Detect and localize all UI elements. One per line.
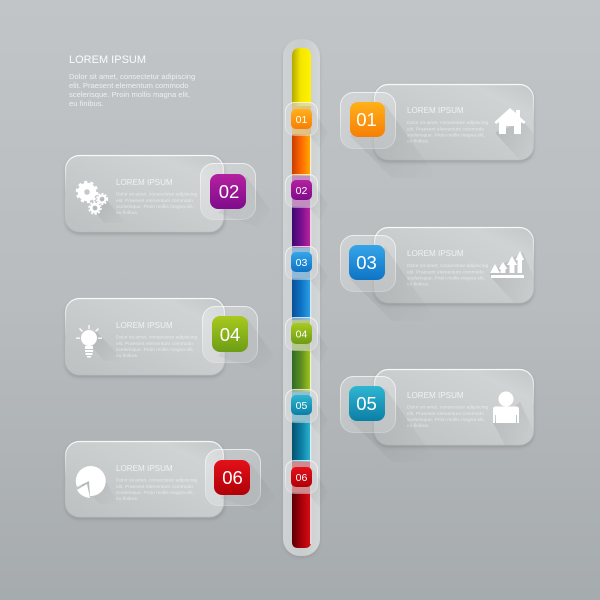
panel: 01 home: [340, 84, 534, 178]
intro text: eu finibus.: [69, 99, 104, 108]
icon: person: [493, 392, 519, 423]
heading: LOREM IPSUM: [116, 321, 173, 330]
body text: elit. Praesent elementum commodo: [116, 198, 193, 204]
body text: elit. Praesent elementum commodo: [407, 270, 484, 276]
number badge: 06: [222, 467, 243, 488]
panel: 05 person: [340, 370, 534, 462]
icon: gears: [77, 182, 107, 214]
heading: LOREM IPSUM: [69, 54, 146, 66]
body text: scelerisque. Proin mollis magna elit,: [407, 276, 485, 282]
intro text: elit. Praesent elementum commodo: [69, 81, 188, 90]
panel: 02 gears: [65, 156, 271, 234]
body text: eu finibus.: [407, 423, 429, 429]
number badge: [340, 376, 437, 462]
icon: house: [494, 108, 526, 134]
body text: scelerisque. Proin mollis magna elit,: [407, 417, 485, 423]
body text: elit. Praesent elementum commodo: [407, 411, 484, 417]
number badge: [340, 236, 437, 321]
number badge: [202, 306, 274, 370]
panel: 03 chart: [340, 228, 534, 321]
icon shadow: [493, 402, 534, 445]
number badge: [206, 450, 276, 512]
heading: LOREM IPSUM: [116, 464, 173, 473]
icon shadow: [490, 252, 534, 303]
number badge: [340, 92, 437, 178]
body text: elit. Praesent elementum commodo: [407, 126, 484, 132]
body text: eu finibus.: [407, 282, 429, 288]
icon: chart baseline: [491, 275, 524, 278]
panel: 04 bulb: [65, 298, 274, 378]
number badge: 02: [219, 181, 239, 202]
timeline marker 01: [286, 102, 328, 149]
intro text: scelerisque. Proin mollis magna elit,: [69, 90, 190, 99]
body text: Dolor sit amet, consectetur adipiscing: [116, 478, 198, 484]
number badge: 01: [356, 109, 377, 130]
number badge: 04: [220, 324, 240, 345]
body text: Dolor sit amet, consectetur adipiscing: [116, 334, 198, 340]
heading: LOREM IPSUM: [116, 178, 173, 187]
number badge: 03: [356, 252, 377, 273]
timeline column: [283, 39, 320, 558]
timeline marker 02: [286, 174, 328, 221]
heading: LOREM IPSUM: [407, 249, 464, 258]
body text: elit. Praesent elementum commodo: [116, 341, 193, 347]
body text: scelerisque. Proin mollis magna elit,: [116, 204, 194, 210]
timeline marker 03: [286, 246, 328, 293]
body text: scelerisque. Proin mollis magna elit,: [407, 132, 485, 138]
body text: elit. Praesent elementum commodo: [116, 484, 193, 490]
body text: Dolor sit amet, consectetur adipiscing: [407, 120, 489, 126]
timeline marker 03: 03: [296, 257, 307, 269]
body text: scelerisque. Proin mollis magna elit,: [116, 490, 194, 496]
heading: LOREM IPSUM: [407, 391, 464, 400]
body text: Dolor sit amet, consectetur adipiscing: [407, 263, 489, 269]
timeline marker 06: [286, 460, 328, 508]
timeline marker 04: [286, 318, 328, 364]
timeline marker 05: [286, 390, 328, 436]
icon: rising arrows: [490, 251, 524, 273]
icon shadow: [78, 470, 118, 504]
timeline marker 05: 05: [296, 400, 307, 412]
icon shadow: [496, 122, 534, 160]
icon: light bulb: [76, 325, 102, 358]
number badge: 05: [356, 393, 377, 414]
body text: scelerisque. Proin mollis magna elit,: [116, 347, 194, 353]
timeline marker 06: 06: [296, 472, 307, 484]
icon shadow: [82, 331, 124, 361]
body text: Dolor sit amet, consectetur adipiscing: [116, 192, 198, 198]
timeline marker 04: 04: [296, 328, 307, 340]
number badge: [200, 164, 271, 227]
timeline marker 01: 01: [296, 114, 307, 126]
heading: LOREM IPSUM: [407, 106, 464, 115]
intro text: Dolor sit amet, consectetur adipiscing: [69, 72, 195, 81]
body text: eu finibus.: [407, 138, 429, 144]
icon shadow: [90, 197, 126, 223]
body text: Dolor sit amet, consectetur adipiscing: [407, 404, 489, 410]
panel: 06 pie chart: [65, 442, 276, 520]
body text: eu finibus.: [116, 210, 138, 216]
title block: [69, 54, 195, 108]
body text: eu finibus.: [116, 353, 138, 359]
colour segments: [292, 48, 311, 548]
icon: pie chart: [76, 466, 106, 498]
timeline marker 02: 02: [296, 185, 307, 197]
body text: eu finibus.: [116, 496, 138, 502]
